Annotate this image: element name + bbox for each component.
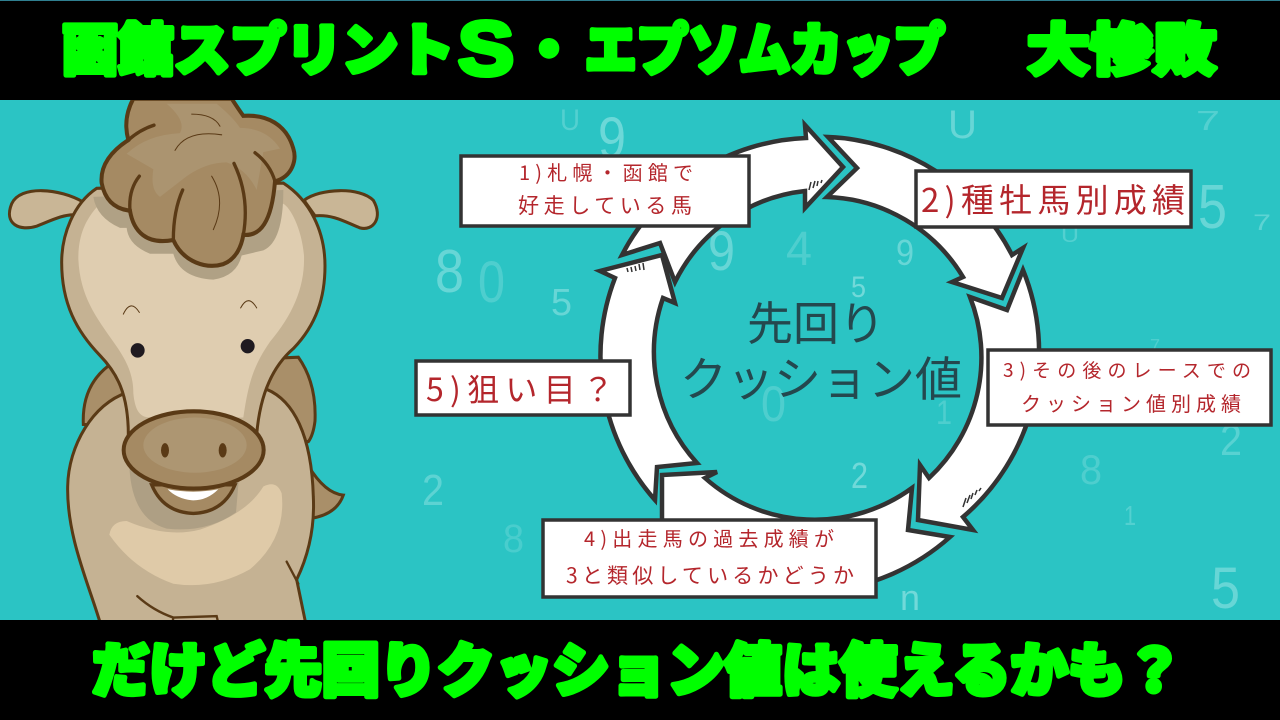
centre label: 先回り (747, 288, 885, 354)
step 3 box: クッション値別成績 (1021, 388, 1241, 417)
background digits: 9 (598, 106, 626, 171)
background digits: n (900, 577, 920, 618)
background digits: 5 (851, 271, 866, 304)
muzzle (124, 411, 264, 489)
step 5 box: 5)狙い目？ (426, 365, 614, 411)
step 2 box: 2)種牡馬別成績 (921, 174, 1185, 222)
hair strands (128, 125, 275, 240)
horse tail (308, 466, 343, 518)
hair shadow (93, 190, 283, 280)
step 3 box: 3)その後のレースでの (1003, 356, 1251, 383)
background digits: 4 (786, 223, 812, 276)
background digits: 5 (1198, 173, 1227, 242)
background digits: 1 (1124, 500, 1136, 531)
hair highlight (127, 104, 280, 197)
step 1 box (461, 156, 749, 226)
background digits: 7 (1150, 336, 1160, 356)
step 4 box (543, 520, 876, 597)
background digits: 7 (1253, 210, 1271, 235)
eyes (131, 339, 255, 358)
background digits: 1 (936, 394, 952, 432)
body highlight (109, 484, 282, 585)
background digits: 8 (1080, 446, 1102, 493)
horse character (9, 99, 377, 628)
background digits: 5 (551, 282, 572, 324)
step 1 box: 好走している馬 (518, 190, 692, 220)
horse body (68, 389, 314, 628)
teeth (168, 489, 218, 500)
background digits: 0 (478, 250, 505, 315)
background digits: 9 (708, 219, 735, 282)
arrow tick marks (627, 180, 981, 507)
background digits: 5 (1211, 556, 1240, 621)
step 1 box: 1)札幌・函館で (519, 157, 693, 186)
centre label: クッション値 (680, 341, 962, 410)
arrow 5 to 1 (600, 255, 697, 500)
arrow 4 to 5 (662, 472, 950, 592)
head (62, 183, 325, 435)
background digits: 8 (503, 517, 524, 561)
banner subhead: だけど先回りクッション値は使えるかも？ (92, 624, 1183, 708)
background digits: U (560, 104, 580, 137)
nostrils (161, 443, 227, 458)
background digits: 8 (435, 238, 464, 305)
arrow 2 to 3 (827, 137, 1023, 298)
background digits (422, 103, 1271, 621)
background digits: 0 (761, 376, 786, 432)
top banner (0, 0, 1280, 100)
centre label (680, 288, 962, 410)
mouth (152, 485, 235, 513)
banner headline: 大惨敗 (1027, 6, 1216, 87)
banner headline (62, 6, 1216, 92)
eyebrows (123, 301, 257, 314)
background digits: 9 (896, 232, 914, 273)
bottom banner (0, 620, 1280, 720)
arrow 1 to 2 (622, 125, 843, 282)
banner headline: S (458, 7, 514, 92)
step 4 box: 4)出走馬の過去成績が (584, 523, 834, 552)
cycle diagram arrows (600, 125, 1039, 592)
background digits: 7 (1196, 105, 1220, 136)
background digits: 2 (422, 466, 444, 515)
hair (101, 99, 294, 266)
right ear (304, 191, 377, 228)
banner headline: 函館スプリント (62, 6, 454, 87)
banner headline: エプソムカップ (585, 6, 945, 87)
background digits: U (948, 103, 977, 147)
step 4 box: 3と類似しているかどうか (566, 560, 854, 590)
step 3 box (988, 350, 1271, 425)
background digits: 2 (1220, 416, 1242, 465)
horse back mane (83, 357, 315, 442)
face highlight (78, 204, 304, 418)
body lines (137, 562, 298, 628)
background digits: 2 (851, 455, 868, 496)
background digits: U (1061, 225, 1079, 247)
arrow 3 to 4 (918, 270, 1039, 530)
muzzle highlight (143, 418, 247, 473)
left ear (9, 191, 83, 228)
chin shadow (129, 466, 240, 529)
banner headline: ・ (521, 6, 577, 87)
